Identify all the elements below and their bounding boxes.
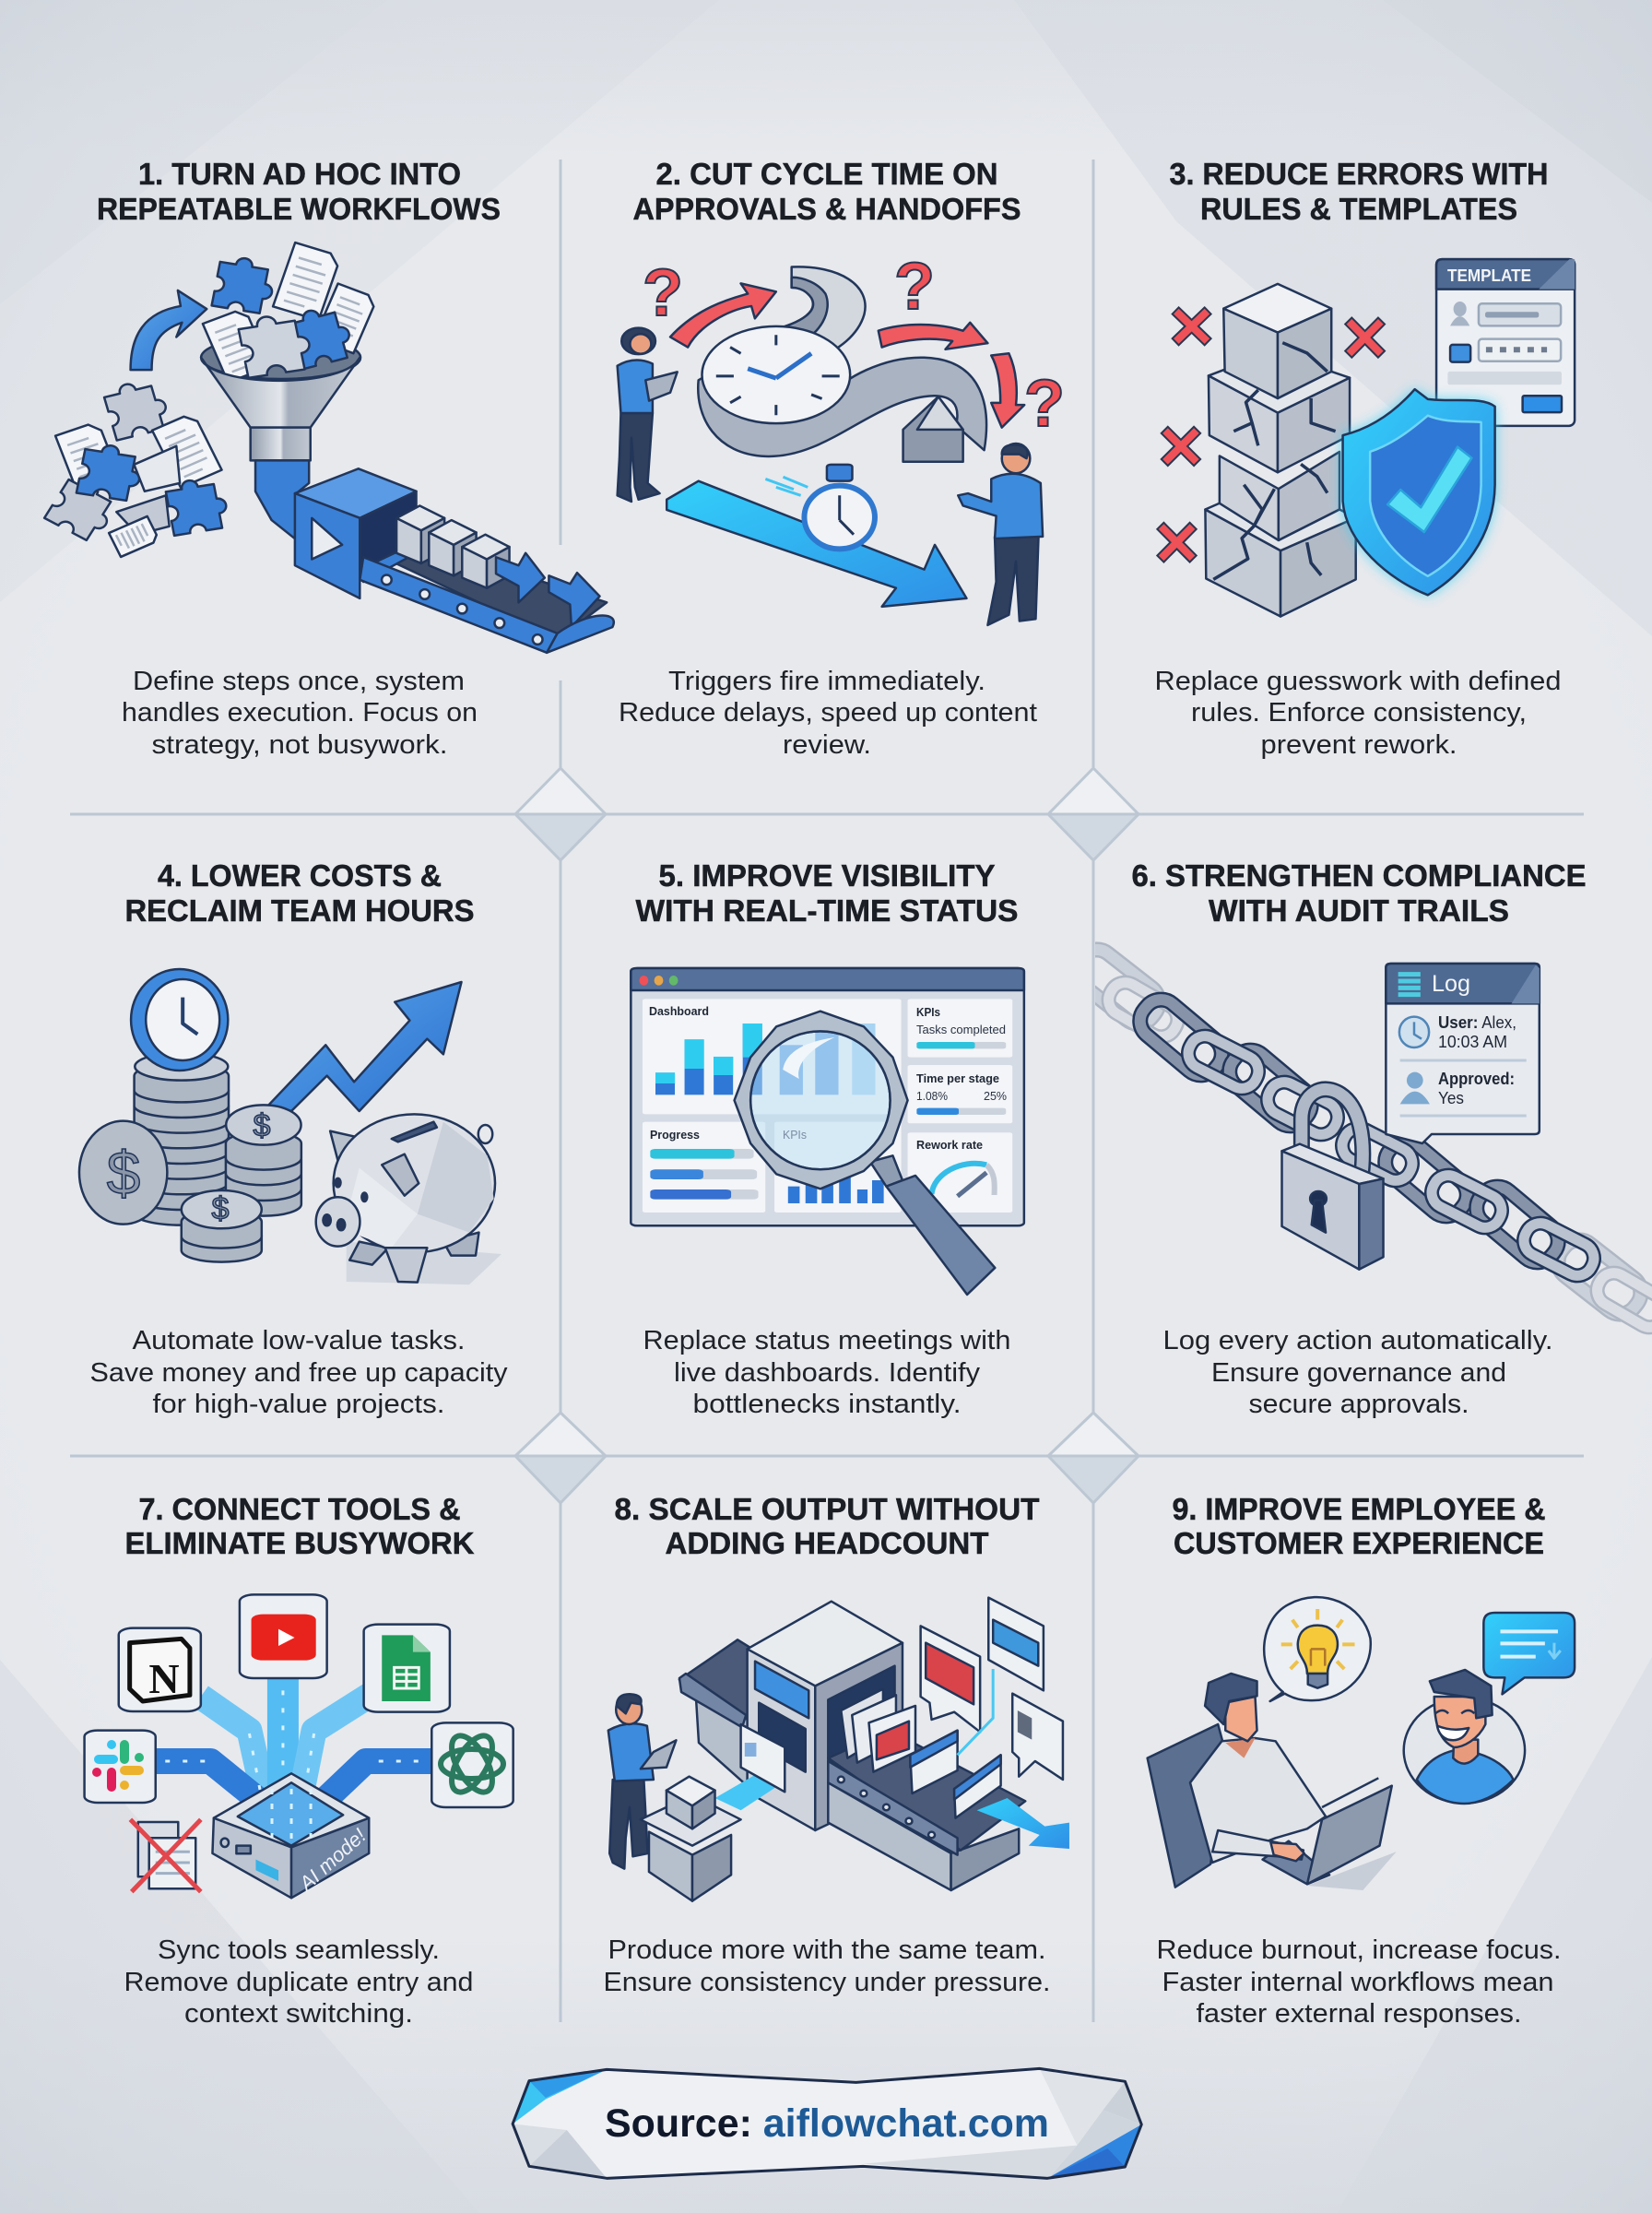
heading 4	[125, 858, 474, 928]
illustration 6: chain, padlock and log	[1068, 942, 1652, 1333]
icon: curved blue arrow	[131, 290, 206, 370]
data streams	[156, 1678, 431, 1810]
diamond node upper left	[515, 768, 606, 860]
icon: question marks: ?	[1024, 367, 1065, 441]
body text 2: Triggers fire immediately.	[668, 667, 985, 696]
body text 5: live dashboards. Identify	[674, 1358, 981, 1388]
dashboard labels: KPIs	[916, 1005, 940, 1019]
heading 8: ADDING HEADCOUNT	[666, 1526, 988, 1560]
icon: person with laptop	[608, 1694, 676, 1869]
icon: stacked cracked blocks	[1205, 284, 1356, 617]
heading 7: ELIMINATE BUSYWORK	[125, 1526, 475, 1560]
icon: red curved arrows	[670, 283, 1024, 428]
source text: Source: aiflowchat.com	[605, 2101, 1049, 2146]
dashboard labels: Rework rate	[916, 1138, 983, 1152]
icon: dollar signs: $	[107, 1139, 140, 1207]
heading 5: WITH REAL-TIME STATUS	[636, 893, 1018, 928]
source badge	[513, 2068, 1141, 2178]
icon: document cards on belt	[741, 1689, 1001, 1818]
heading 4: 4. LOWER COSTS &	[158, 858, 442, 893]
icon: happy customer portrait	[1404, 1670, 1525, 1804]
heading 5	[636, 858, 1018, 928]
body text 8: Produce more with the same team.	[608, 1935, 1045, 1965]
icon: output arrow	[977, 1798, 1069, 1849]
icon: dollar signs	[107, 1108, 271, 1226]
icon: blue wall clock	[131, 969, 228, 1071]
tool tiles	[85, 1594, 513, 1807]
illustration 4: coins, clock, growth arrow and piggy bank	[79, 969, 502, 1284]
icon: stopwatch	[765, 465, 875, 549]
progress bars	[650, 1042, 1006, 1200]
heading 8	[614, 1492, 1040, 1560]
icon: dollar signs: $	[254, 1108, 271, 1143]
icon: google sheets	[382, 1635, 431, 1701]
icon: rising arrow	[268, 982, 462, 1111]
illustration 2: winding clock and handoffs	[618, 250, 1065, 625]
body text 1: Define steps once, system	[133, 667, 465, 696]
grid dividers	[70, 160, 1584, 2022]
body text 7: Remove duplicate entry and	[124, 1968, 474, 1997]
body text 4: Save money and free up capacity	[90, 1358, 508, 1388]
heading 9: CUSTOMER EXPERIENCE	[1174, 1526, 1544, 1560]
body text 1: handles execution. Focus on	[122, 698, 478, 728]
body text 6: secure approvals.	[1248, 1390, 1469, 1419]
body text 3: prevent rework.	[1261, 730, 1457, 760]
body text 2: review.	[783, 730, 871, 760]
illustration 7: connected tool icons	[85, 1594, 513, 1898]
icon: front conveyor	[828, 1731, 1025, 1890]
mini bar chart	[788, 1178, 884, 1203]
dashboard labels: Dashboard	[649, 1004, 709, 1018]
heading 6: WITH AUDIT TRAILS	[1209, 893, 1509, 928]
body text 5: bottlenecks instantly.	[693, 1390, 961, 1419]
body text 2: Reduce delays, speed up content	[619, 698, 1037, 728]
body text 7	[124, 1935, 474, 2029]
log card	[1386, 964, 1540, 1143]
icon: lightbulb thought bubble	[1264, 1597, 1371, 1701]
icon: blue chat bubble	[1483, 1613, 1575, 1694]
dashboard labels: Tasks completed	[916, 1023, 1006, 1036]
heading 7: 7. CONNECT TOOLS &	[138, 1492, 461, 1526]
icon: man gesturing	[958, 444, 1043, 625]
icon: pedestal with cube	[641, 1777, 741, 1901]
dashboard labels: 1.08%	[916, 1089, 948, 1103]
diamond node lower right	[1048, 1413, 1139, 1503]
body text 9	[1156, 1935, 1562, 2029]
body text 3: Replace guesswork with defined	[1154, 667, 1562, 696]
dashboard labels: Time per stage	[916, 1071, 999, 1085]
icon: scattered pile of puzzle pieces and documents	[44, 377, 230, 557]
icon: red error marks	[1163, 314, 1378, 555]
body text 3	[1154, 667, 1562, 760]
body text 5: Replace status meetings with	[643, 1326, 1010, 1355]
icon: large upright coin	[79, 1121, 167, 1225]
icon: dollar signs: $	[212, 1191, 230, 1226]
body text 8: Ensure consistency under pressure.	[603, 1968, 1051, 1997]
icon: woman with tablet	[618, 328, 678, 502]
illustration 5: dashboard with magnifier	[631, 968, 1024, 1295]
icon: glowing blue shield	[1343, 389, 1495, 595]
heading 9	[1173, 1492, 1545, 1560]
illustration 8: content production machine	[608, 1598, 1069, 1901]
heading 1	[97, 157, 501, 226]
icon: winding clock ribbon	[698, 266, 986, 462]
body text 5	[643, 1326, 1010, 1419]
heading 2	[632, 157, 1021, 226]
body text 7: Sync tools seamlessly.	[158, 1935, 440, 1965]
dashboard labels: 25%	[984, 1089, 1007, 1103]
heading 2: APPROVALS & HANDOFFS	[632, 192, 1021, 226]
bar chart	[655, 1024, 876, 1095]
icon: notion	[130, 1639, 190, 1701]
heading 6: 6. STRENGTHEN COMPLIANCE	[1132, 858, 1586, 893]
icon: youtube	[252, 1615, 316, 1661]
dashboard labels: KPIs	[783, 1128, 807, 1142]
icon: piggy bank	[316, 1114, 502, 1284]
body text 4: Automate low-value tasks.	[133, 1326, 465, 1355]
body text 3: rules. Enforce consistency,	[1191, 698, 1527, 728]
body text 6: Ensure governance and	[1211, 1358, 1506, 1388]
log labels	[1432, 971, 1516, 1107]
heading 4: RECLAIM TEAM HOURS	[125, 893, 474, 928]
icon: small coin stack	[182, 1190, 262, 1262]
icon: cyan input stream	[715, 1772, 783, 1810]
icon: magnifying glass	[735, 1012, 995, 1295]
body text 9: Faster internal workflows mean	[1162, 1968, 1554, 1997]
heading 2: 2. CUT CYCLE TIME ON	[656, 157, 997, 191]
icon: question marks: ?	[643, 256, 683, 330]
icon: chatgpt knot	[441, 1730, 503, 1798]
heading 1: REPEATABLE WORKFLOWS	[97, 192, 501, 226]
body text 9: faster external responses.	[1197, 1999, 1521, 2029]
dashboard window	[631, 968, 1024, 1225]
template card	[1436, 259, 1575, 426]
label: template: TEMPLATE	[1447, 266, 1531, 285]
heading 7	[125, 1492, 475, 1560]
icon: fast blue arrow	[667, 481, 966, 607]
heading 1: 1. TURN AD HOC INTO	[138, 157, 461, 191]
log labels: 10:03 AM	[1438, 1033, 1507, 1051]
icon: slack	[92, 1740, 144, 1790]
illustration 1: funnel and conveyor	[44, 243, 614, 653]
gauge	[932, 1164, 995, 1196]
icon: question marks	[643, 250, 1065, 441]
dashboard labels: Progress	[650, 1128, 700, 1142]
body text 7: context switching.	[184, 1999, 413, 2029]
icon: back conveyor	[679, 1639, 752, 1789]
body text 6: Log every action automatically.	[1163, 1326, 1552, 1355]
body text 4: for high-value projects.	[153, 1390, 444, 1419]
log labels: User: Alex,	[1438, 1013, 1516, 1032]
diamond node lower left	[515, 1413, 606, 1503]
heading 6	[1132, 858, 1586, 928]
illustration 9: employee and happy customer	[1148, 1597, 1575, 1890]
heading 3	[1169, 157, 1549, 226]
icon: AI mode server box	[212, 1773, 369, 1898]
log labels: Approved:	[1438, 1070, 1515, 1088]
dashboard labels	[649, 1004, 1007, 1152]
body text 8	[603, 1935, 1051, 1997]
heading 5: 5. IMPROVE VISIBILITY	[658, 858, 996, 893]
body text 9: Reduce burnout, increase focus.	[1156, 1935, 1562, 1965]
heading 9: 9. IMPROVE EMPLOYEE &	[1173, 1492, 1545, 1526]
body text 1: strategy, not busywork.	[151, 730, 448, 760]
diamond node upper right	[1048, 768, 1139, 860]
icon: crossed-out documents	[130, 1819, 201, 1892]
body text 6	[1163, 1326, 1552, 1419]
icon: funnel	[201, 243, 377, 538]
icon: medium coin stack	[226, 1105, 301, 1216]
log labels: Yes	[1438, 1089, 1464, 1107]
label: AI mode: AI mode!	[293, 1824, 371, 1897]
icon: question marks: ?	[894, 250, 935, 324]
heading 3: 3. REDUCE ERRORS WITH	[1169, 157, 1549, 191]
illustration 3: cracked blocks, shield and template	[1163, 259, 1575, 617]
icon: machine tower	[748, 1602, 903, 1830]
icon: employee at laptop	[1148, 1674, 1397, 1890]
icon: blue conveyor with blocks	[295, 468, 614, 653]
icon: speech-bubble media cards	[921, 1598, 1063, 1780]
icon: chain	[1068, 942, 1652, 1333]
body text 4	[90, 1326, 508, 1419]
icon: padlock	[1282, 1089, 1384, 1270]
icon: notion letter: N	[148, 1655, 180, 1702]
body text 1	[122, 667, 478, 760]
log labels: Log	[1432, 971, 1470, 997]
body text 2	[619, 667, 1037, 760]
heading 3: RULES & TEMPLATES	[1200, 192, 1517, 226]
heading 8: 8. SCALE OUTPUT WITHOUT	[614, 1492, 1040, 1526]
icon: tall coin stack	[135, 1053, 229, 1225]
